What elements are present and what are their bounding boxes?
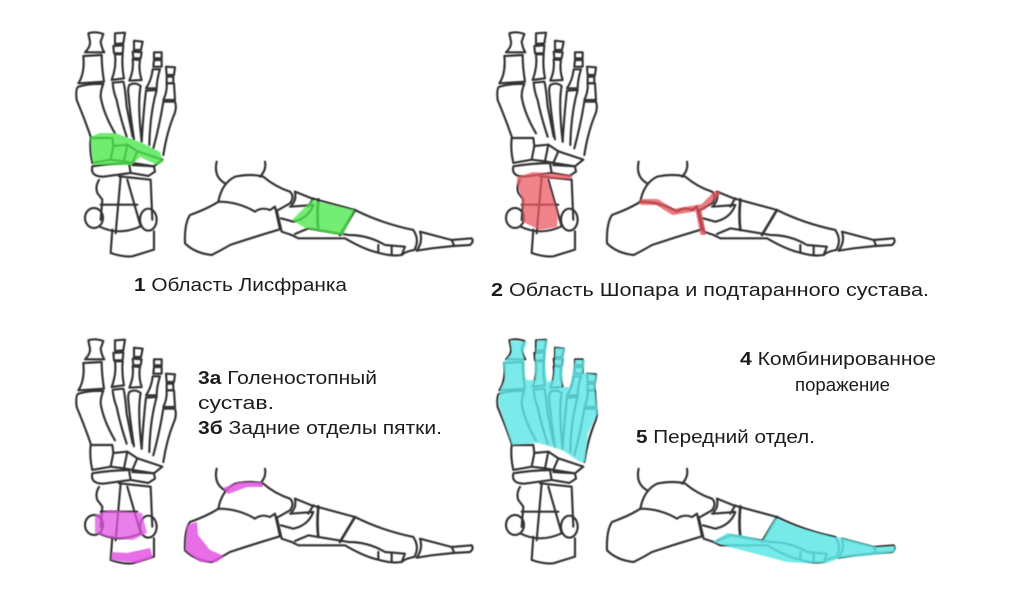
foot lateral view 2	[607, 162, 895, 255]
panel 2: Chopart and subtalar region	[491, 32, 929, 300]
caption 3a: 3а Голеностопный	[198, 368, 377, 388]
panel 1: Lisfranc region	[76, 32, 473, 295]
highlight: ankle joint dorsal	[95, 510, 147, 540]
foot lateral view 1	[185, 162, 473, 255]
panel 3: ankle and rear heel	[76, 339, 473, 563]
highlight: forefoot lateral	[713, 518, 895, 563]
foot lateral view 4	[607, 469, 895, 562]
foot dorsal view 1	[76, 32, 176, 256]
highlight: Chopart dorsal	[517, 172, 572, 230]
caption 4: 4 Комбинированное	[740, 349, 936, 369]
caption 5: 5 Передний отдел.	[636, 427, 815, 447]
caption 2: 2 Область Шопара и подтаранного сустава.	[491, 280, 929, 300]
foot lateral view 3	[185, 469, 473, 562]
highlight: Lisfranc dorsal	[90, 133, 163, 165]
highlight: ankle lateral	[223, 482, 263, 494]
highlight: heel dorsal	[111, 548, 153, 563]
highlight: heel lateral	[185, 522, 224, 562]
highlight: Chopart lateral	[642, 193, 717, 233]
foot dorsal view 3	[76, 339, 176, 563]
panel 4: combined lesion and forefoot	[497, 339, 936, 563]
caption 4 continuation: поражение	[795, 375, 890, 395]
caption 3a continuation: сустав.	[198, 393, 274, 413]
foot dorsal view 4	[497, 339, 597, 563]
caption 1: 1 Область Лисфранка	[134, 275, 348, 295]
caption 3b: 3б Задние отделы пятки.	[198, 418, 442, 438]
highlight: forefoot dorsal	[498, 340, 598, 462]
highlight: Lisfranc lateral	[292, 200, 355, 235]
foot dorsal view 2	[497, 32, 597, 256]
